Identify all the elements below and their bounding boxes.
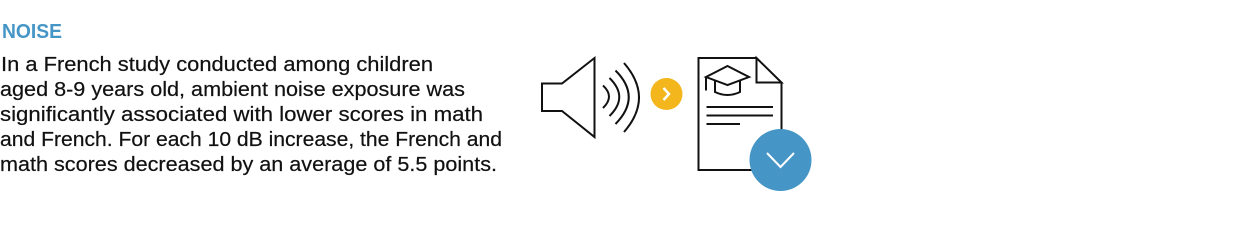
icon: graduation cap — [706, 66, 749, 95]
text block: study description: significantly associated with lower scores in math — [0, 104, 483, 126]
text block: study description: In a French study conducted among children — [1, 54, 433, 76]
document text lines — [706, 107, 773, 124]
icon: yellow arrow circle — [650, 78, 682, 110]
icon: speaker with sound waves — [542, 58, 639, 137]
heading: noise: NOISE — [2, 21, 62, 43]
icon: document with graduation cap — [698, 58, 782, 170]
text block: study description: aged 8-9 years old, ambient noise exposure was — [0, 79, 465, 101]
icon: blue down arrow circle — [750, 129, 812, 191]
text block: study description: math scores decreased by an average of 5.5 points. — [0, 154, 497, 176]
text block: study description — [0, 54, 502, 176]
text block: study description: and French. For each 10 dB increase, the French and — [0, 129, 502, 151]
